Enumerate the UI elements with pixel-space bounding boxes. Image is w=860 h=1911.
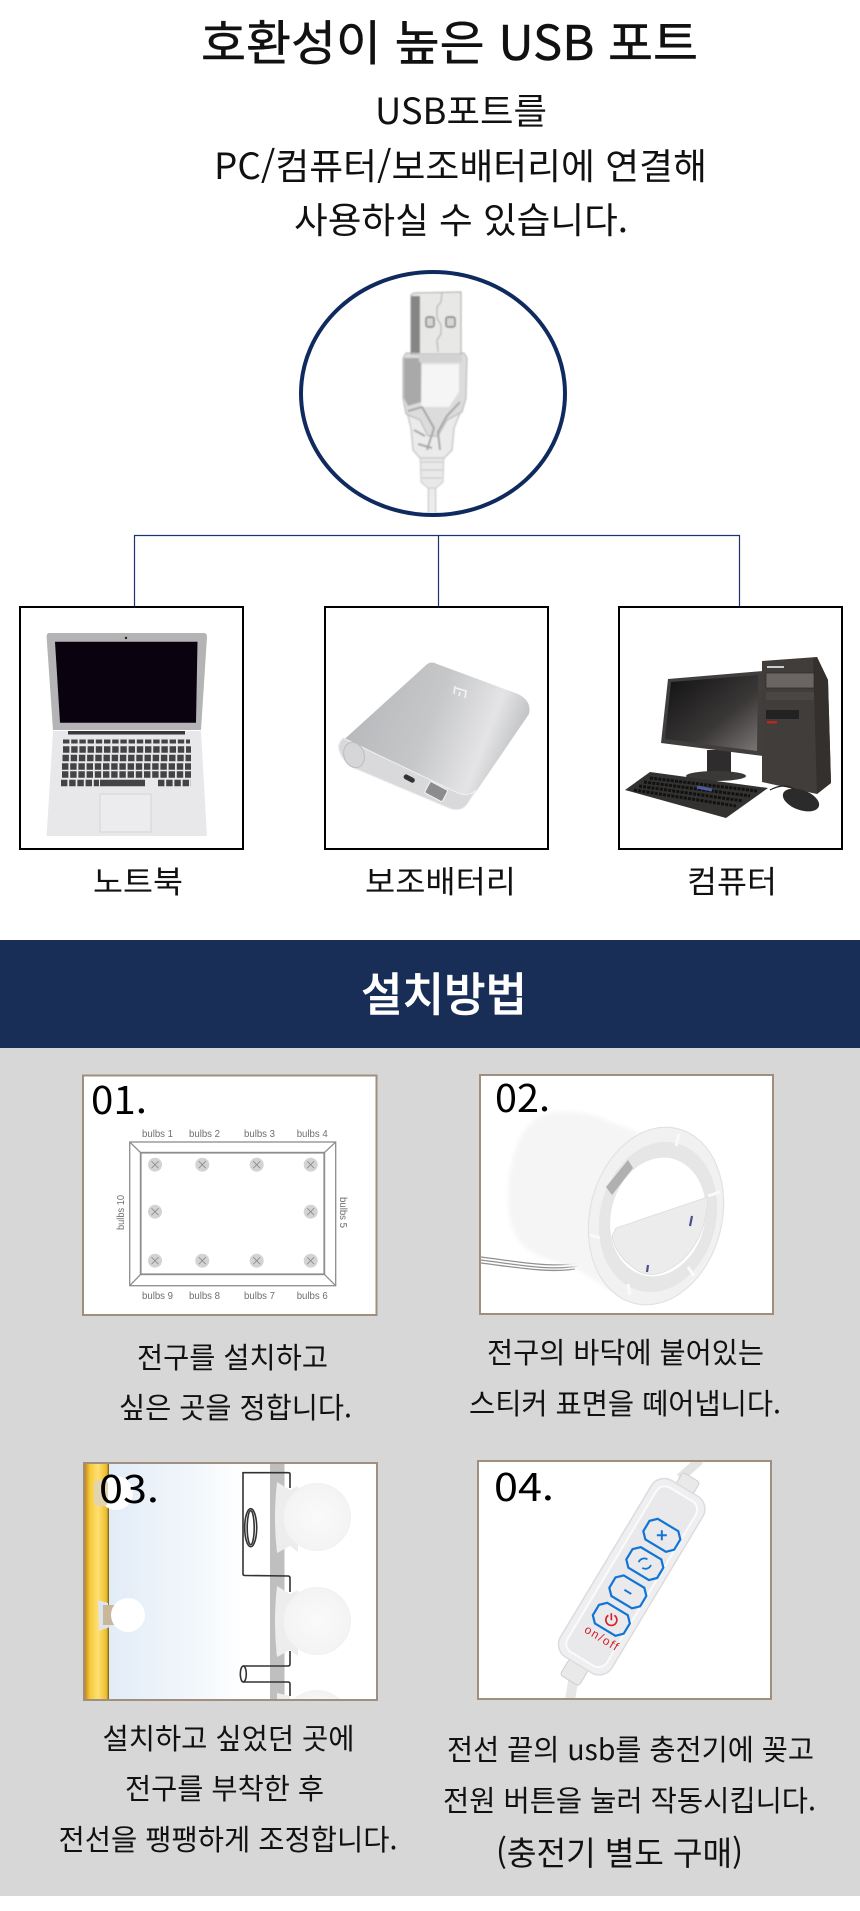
step 3 text: 전선을 팽팽하게 조정합니다.: [58, 1817, 398, 1859]
label: power bank: 보조배터리: [365, 857, 516, 902]
bulb labels: bulbs 9: [142, 1290, 173, 1302]
step 4 text: (충전기 별도 구매): [496, 1827, 743, 1875]
step 2 text: 전구의 바닥에 붙어있는: [487, 1330, 764, 1372]
panel: laptop: [20, 607, 243, 849]
label: computer: 컴퓨터: [687, 857, 777, 902]
plus button: [642, 1518, 682, 1553]
monitor stand: [707, 750, 731, 774]
label: laptop: 노트북: [93, 857, 183, 902]
description text: PC/컴퓨터/보조배터리에 연결해: [214, 138, 707, 190]
cable top: [680, 1460, 700, 1478]
ring ribs: [590, 1134, 720, 1295]
description text: 사용하실 수 있습니다.: [294, 192, 628, 244]
bulb labels: bulbs 10: [115, 1195, 127, 1230]
usb housing light centre: [421, 364, 459, 407]
step 1 text: 싶은 곳을 정합니다.: [119, 1385, 352, 1427]
monitor screen: [665, 675, 758, 751]
power bank button: [340, 739, 368, 771]
step 4 text: 전원 버튼을 눌러 작동시킵니다.: [443, 1778, 816, 1820]
connector lines: [134, 536, 740, 606]
laptop screen: [55, 642, 198, 723]
bulb labels: [115, 1128, 349, 1302]
description text: USB포트를: [375, 83, 547, 135]
laptop lid: [47, 633, 207, 730]
gold frame: [85, 1463, 109, 1700]
power bank usb port: [424, 781, 448, 802]
lit bulb lower: [98, 1598, 145, 1632]
step 3 text: 전구를 부착한 후: [125, 1766, 324, 1808]
mouse: [780, 784, 822, 816]
description text: [214, 83, 707, 244]
panel: step 3: [83, 1462, 378, 1701]
usb housing: [403, 353, 467, 436]
bulb labels: bulbs 1: [142, 1128, 173, 1140]
banner heading: 설치방법: [361, 959, 527, 1025]
bulb base hole: [598, 1147, 718, 1287]
bulb base ring: [570, 1113, 742, 1319]
usb neck: [420, 452, 444, 488]
step 1 text: [119, 1335, 352, 1427]
step number: 03.: [99, 1459, 159, 1514]
side bulbs: [275, 1482, 351, 1699]
mirror surface: [109, 1464, 212, 1699]
clip slot: [606, 1160, 633, 1195]
step 4 text: [443, 1727, 816, 1875]
cable bottom: [570, 1670, 575, 1700]
step 4 text: 전선 끝의 usb를 충전기에 꽂고: [447, 1727, 814, 1769]
on/off label: on/off: [582, 1622, 622, 1654]
laptop keyboard: [61, 742, 191, 783]
title: 호환성이 높은 USB 포트: [201, 4, 698, 74]
power bank end face: [339, 738, 476, 810]
lit bulb upper: [104, 1476, 133, 1510]
bulb base body: [508, 1112, 660, 1290]
usb cable: [429, 470, 435, 515]
power bank logo: [454, 686, 466, 698]
laptop trackpad: [100, 794, 151, 832]
bulb markers: [148, 1158, 318, 1268]
panel: step 1: [83, 1070, 376, 1315]
strain relief: [676, 1472, 700, 1493]
power bank micro port: [403, 774, 416, 784]
step number: 04.: [494, 1457, 554, 1512]
sticker peel: [612, 1197, 708, 1274]
mirror frame diagram: [130, 1142, 336, 1286]
usb housing detail: [408, 402, 460, 450]
remote body: [558, 1478, 706, 1676]
wiring: [240, 1473, 290, 1696]
bulb labels: bulbs 6: [297, 1290, 328, 1302]
power bank body: [338, 663, 530, 810]
section banner: [0, 940, 860, 1048]
minus button: [608, 1574, 648, 1610]
tower: [762, 657, 831, 794]
step 2 text: 스티커 표면을 떼어냅니다.: [469, 1381, 781, 1423]
usb housing dark band: [404, 358, 421, 406]
sticker marks: [647, 1216, 692, 1272]
step 3 text: [58, 1716, 398, 1859]
step 3 text: 설치하고 싶었던 곳에: [102, 1716, 354, 1758]
bulb labels: bulbs 7: [244, 1290, 275, 1302]
install section background: [0, 1048, 860, 1896]
wall strip: [270, 1463, 284, 1700]
step 1 text: 전구를 설치하고: [137, 1335, 328, 1377]
mode button: [625, 1546, 664, 1582]
bulb labels: bulbs 2: [189, 1128, 220, 1140]
power button: [592, 1602, 631, 1637]
keyboard: [625, 772, 768, 818]
panel: power bank: [325, 607, 548, 849]
panel: step 2: [480, 1068, 773, 1319]
bulb labels: bulbs 5: [337, 1197, 349, 1228]
step number: 01.: [91, 1070, 147, 1125]
usb metal tip: [411, 292, 461, 354]
monitor: [661, 671, 763, 756]
step number: 02.: [495, 1068, 550, 1123]
usb notch line: [437, 293, 442, 352]
remote: [558, 1472, 706, 1686]
wires: [481, 1257, 578, 1270]
bulb labels: bulbs 4: [297, 1128, 328, 1140]
usb holes: [426, 317, 455, 327]
tower drive bays: [766, 673, 814, 688]
bulb labels: bulbs 3: [244, 1128, 275, 1140]
usb strain relief: [406, 413, 461, 459]
icon: USB plug in circle: [301, 272, 565, 515]
panel: desktop computer: [619, 607, 842, 849]
panel: step 4: [478, 1457, 771, 1700]
usb metal side: [411, 296, 420, 353]
step 2 text: [469, 1330, 781, 1423]
laptop base: [47, 731, 207, 836]
bulb labels: bulbs 8: [189, 1290, 220, 1302]
